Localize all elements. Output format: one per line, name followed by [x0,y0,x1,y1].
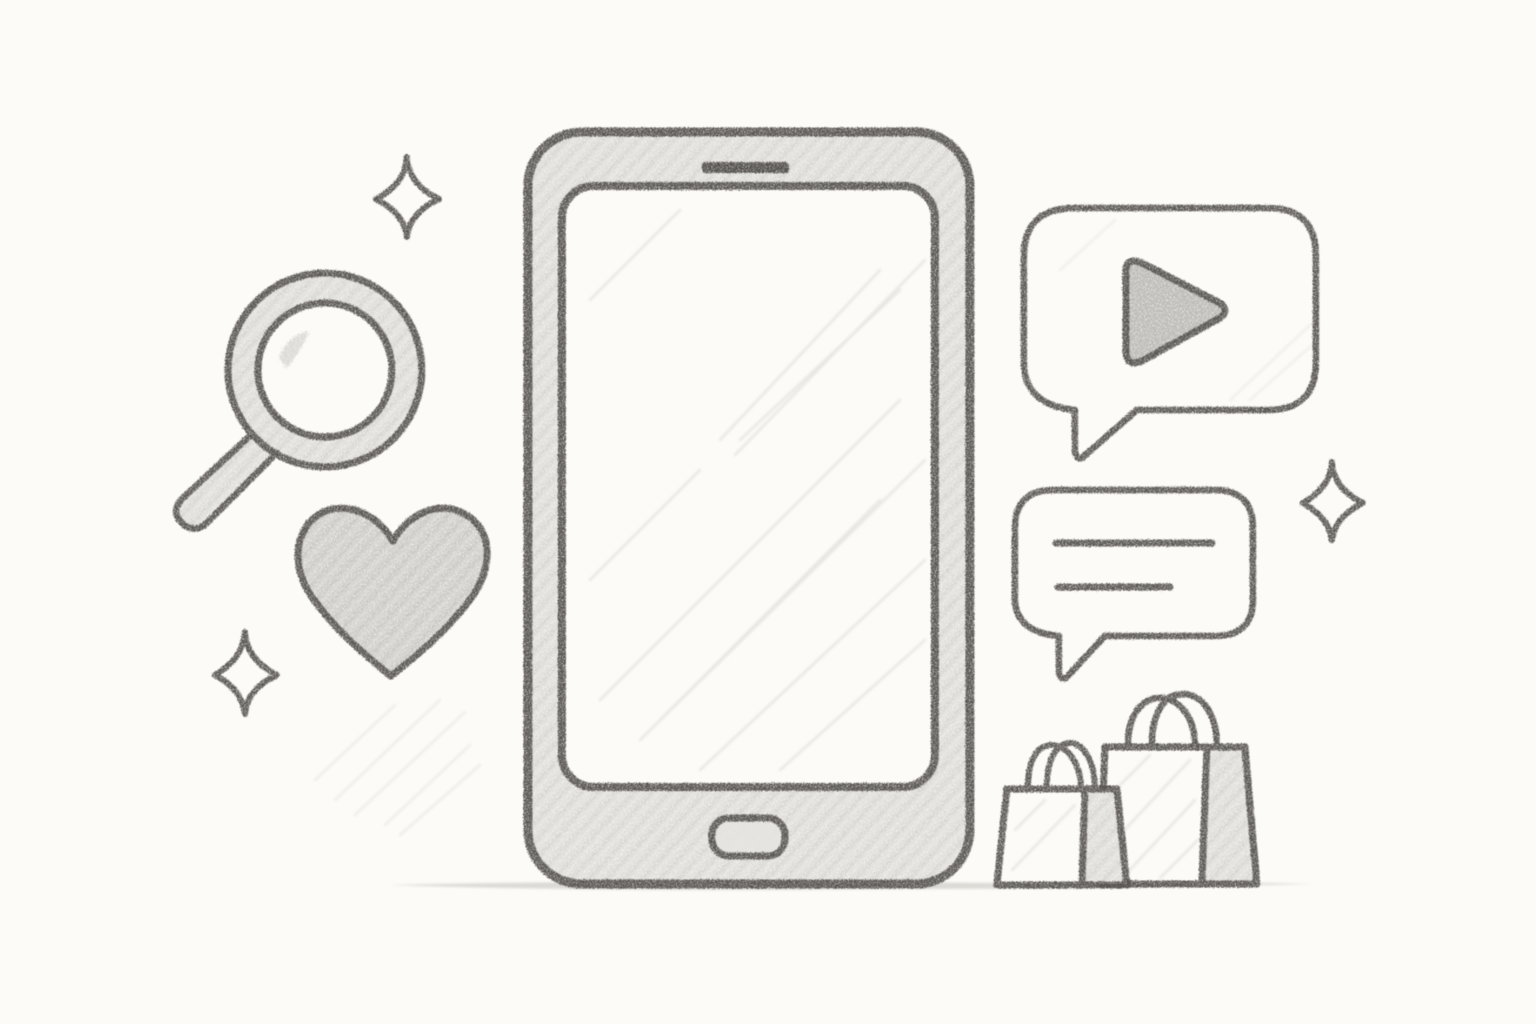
bubble outlines [1024,208,1316,458]
magnifier outlines [176,273,422,529]
bubble shading [1060,220,1312,400]
icon: shopping bags [997,694,1257,885]
icon: magnifying glass [176,272,422,529]
heart fill [298,508,487,676]
icon: sparkle lower left [215,632,277,714]
handle fill [176,430,279,529]
icon: sparkle right [1303,462,1363,540]
lens highlight [279,331,310,368]
background hatching lower left [315,700,480,835]
heart outline [298,508,487,676]
small bag [997,743,1127,885]
icon: text speech bubble [1015,490,1253,678]
phone home button [712,818,785,856]
text line 2 [1058,584,1170,590]
icon: sparkle top left [376,157,439,237]
text line 1 [1056,540,1212,546]
large bag [1100,694,1257,884]
lens ring fill [228,272,422,466]
phone screen fill [562,186,935,787]
icon: video speech bubble [1024,208,1316,458]
play triangle fill [1126,261,1225,363]
ground shadow [388,881,1315,890]
icon: heart [298,508,487,676]
phone outlines [528,132,970,884]
icon: smartphone [528,132,970,884]
bubble outline [1015,490,1253,678]
phone body fill [528,132,970,884]
screen shading strokes [590,210,925,770]
